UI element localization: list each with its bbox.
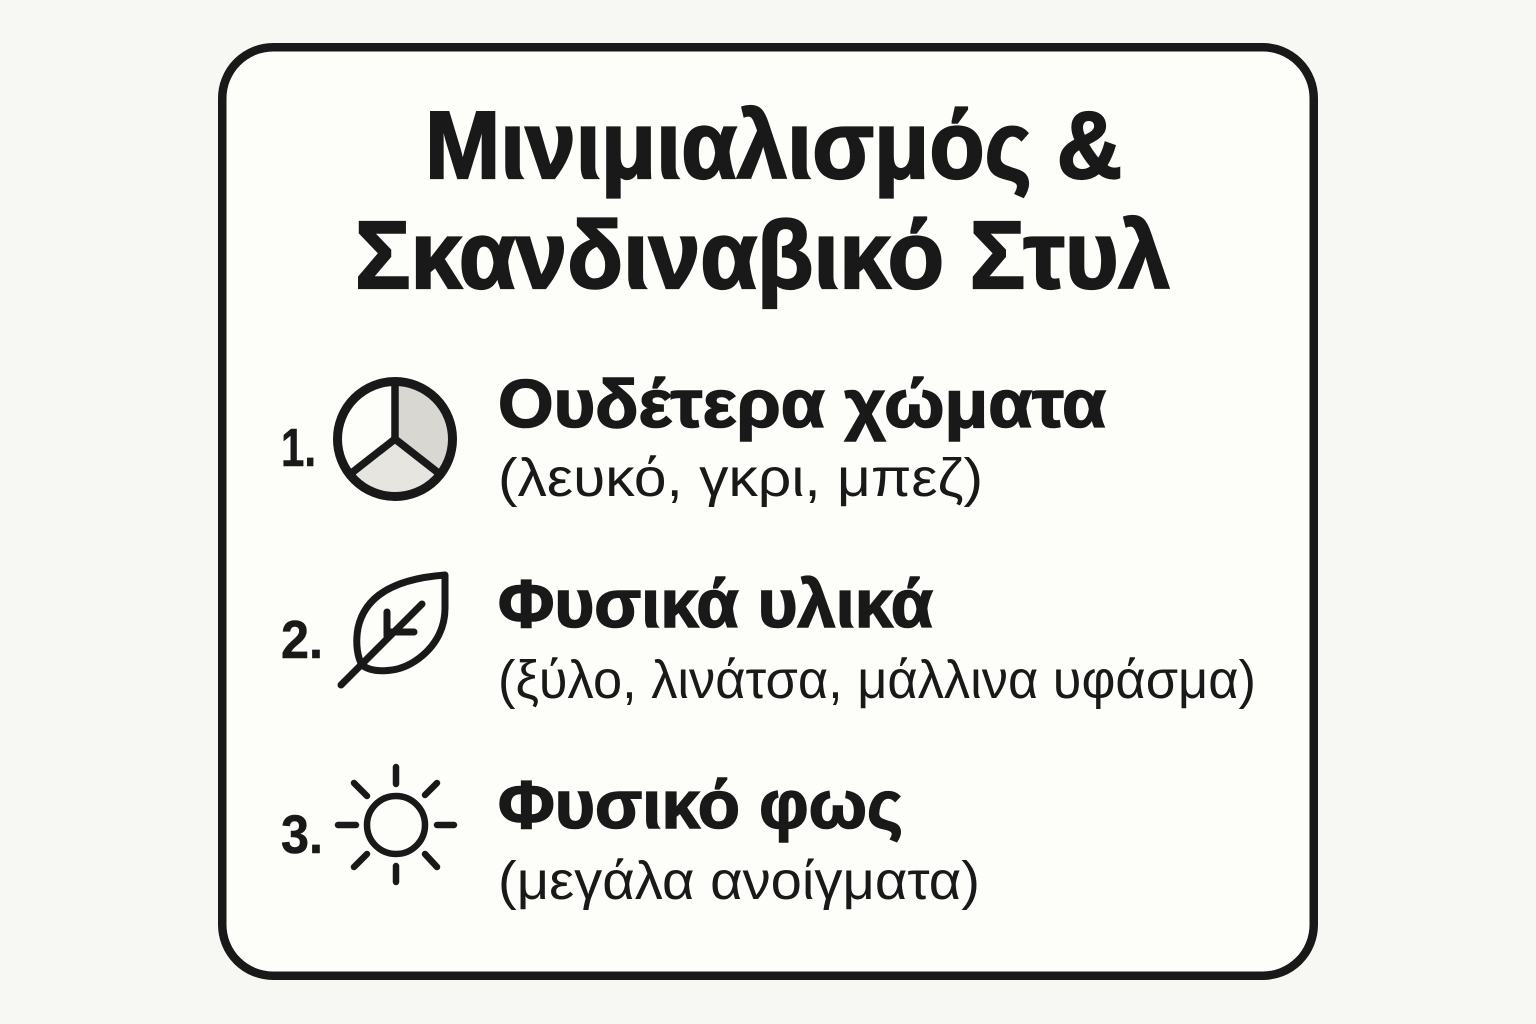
number 2: 2. [281,610,323,670]
title [355,92,1170,309]
item 2: natural materials [281,566,1256,710]
item 3: natural light [281,767,980,911]
item 1: neutral colours [281,366,1106,508]
icon: sun [338,767,454,882]
heading 3: Φυσικό φως [498,767,903,843]
icon: leaf [341,575,445,685]
number 1: 1. [281,418,316,478]
icon: pie with three neutral segments [338,381,454,498]
title: Σκανδιναβικό Στυλ [355,202,1170,309]
heading 1: Ουδέτερα χώματα [498,366,1106,442]
panel: main card [222,47,1314,976]
description 1: (λευκό, γκρι, μπεζ) [498,448,983,508]
number 3: 3. [281,805,323,865]
description 2: (ξύλο, λινάτσα, μάλλινα υφάσμα) [498,650,1256,710]
title: Μινιμιαλισμός & [425,92,1122,199]
description 3: (μεγάλα ανοίγματα) [498,851,980,911]
heading 2: Φυσικά υλικά [498,566,933,642]
